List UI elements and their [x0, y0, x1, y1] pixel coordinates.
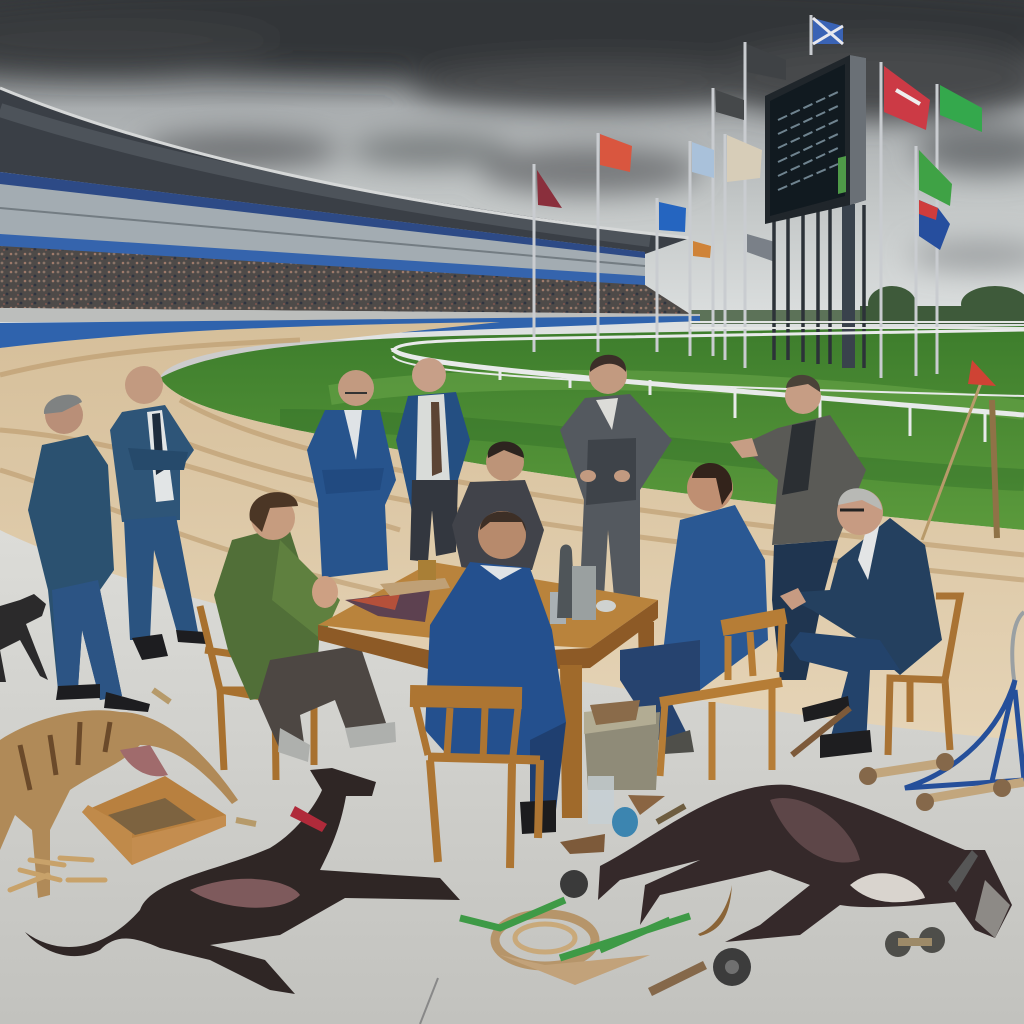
background tree line: [690, 286, 1024, 324]
chair front: [410, 696, 540, 868]
sky: [0, 0, 1024, 340]
scattered bones pile: [10, 858, 105, 890]
small black dog at left edge: [0, 594, 48, 682]
collapsed dark greyhound: [598, 785, 1012, 942]
corner marker stake: [922, 360, 997, 540]
person: grey jacket, gesturing: [730, 375, 866, 680]
brindle greyhound: [0, 710, 238, 898]
black greyhound with red collar: [25, 768, 460, 994]
person: seated at back of table: [452, 442, 544, 570]
dirt track: [0, 322, 1024, 760]
wooden chair left: [200, 606, 316, 780]
running rail: [393, 330, 1024, 442]
person: green jacket seated: [214, 492, 396, 762]
person: seated right, dark suit, glasses: [780, 488, 942, 758]
table: [318, 560, 658, 818]
infield grass: [160, 326, 1024, 530]
grandstand: [0, 88, 700, 348]
concrete foreground: [0, 530, 1024, 1024]
storage crate: [584, 700, 660, 790]
person: arms crossed suit: [110, 366, 206, 660]
flags and poles: [534, 15, 982, 378]
dumbbells and small items: [153, 690, 945, 992]
harness equipment on ground right: [859, 612, 1024, 811]
chair right: [888, 596, 960, 755]
person: bald suit arms crossed: [307, 370, 396, 578]
scoreboard: [765, 55, 866, 368]
wooden treat tray: [82, 776, 226, 865]
far fence: [690, 322, 1024, 328]
person: blue jacket seated right, back view: [620, 463, 768, 754]
person: blue suit seated front, back view: [425, 511, 566, 834]
chair in front of right seated person: [660, 616, 786, 780]
flask and cups on table: [550, 544, 616, 624]
person: grey overalls hands on hips: [560, 355, 672, 597]
person: far left suit: [28, 395, 150, 712]
coiled rope and green tools: [460, 900, 690, 985]
person: suit with brown tie: [396, 358, 470, 562]
